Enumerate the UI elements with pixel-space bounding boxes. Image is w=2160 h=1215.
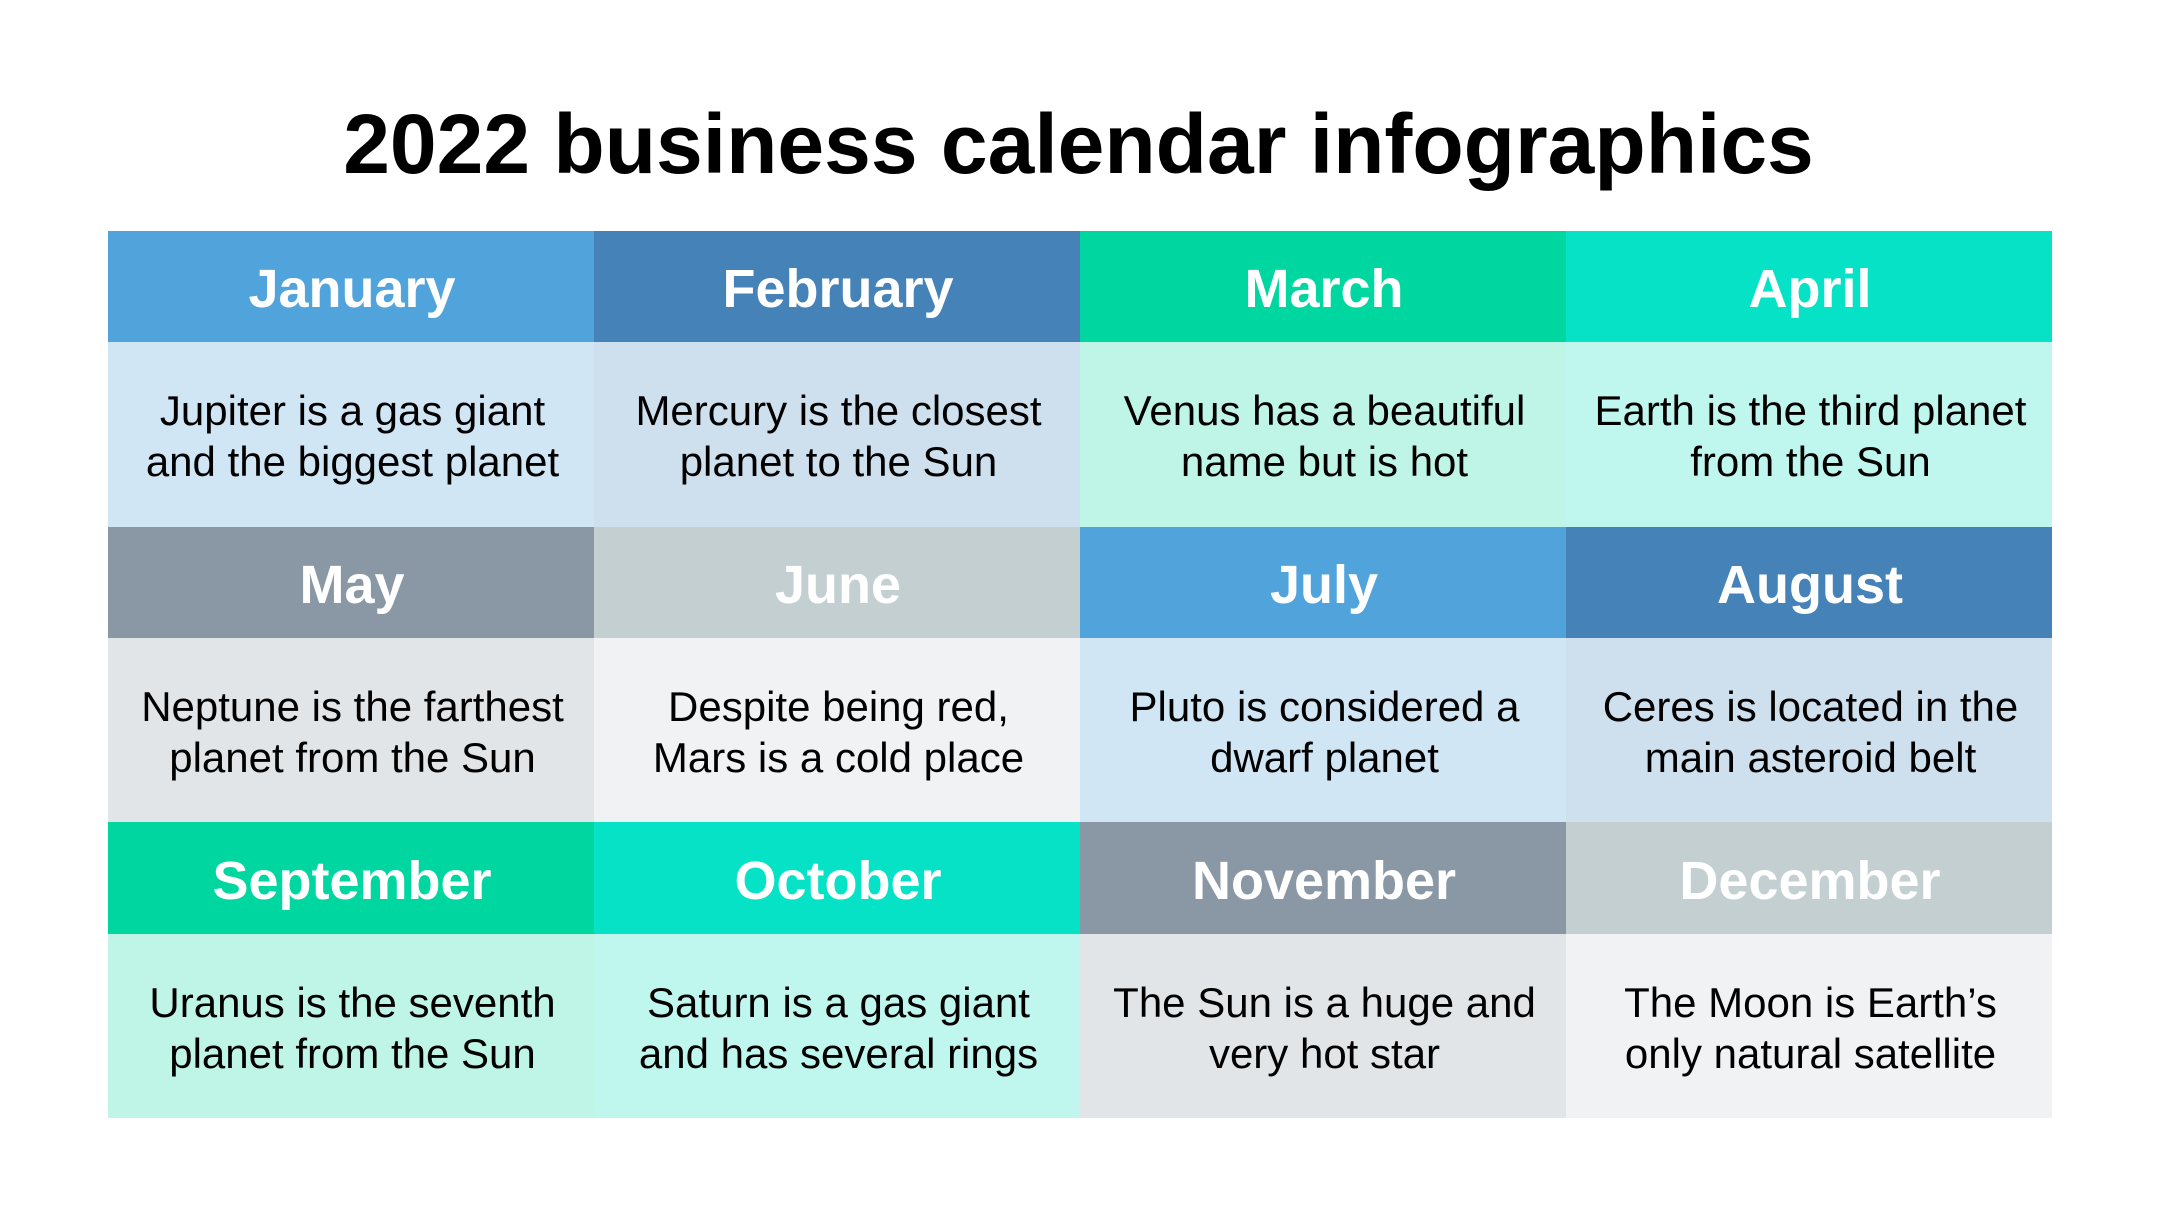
text: April description: from the Sun <box>1690 438 1931 484</box>
heading: March <box>1080 231 1566 342</box>
panel: March <box>1080 231 1566 527</box>
text: March description <box>1080 342 1566 527</box>
panel: September <box>108 822 594 1118</box>
text: March description: name but is hot <box>1181 438 1468 484</box>
heading: June <box>594 527 1080 638</box>
heading: March: March <box>1244 259 1404 319</box>
heading: August: August <box>1717 555 1903 615</box>
panel: June <box>594 527 1080 822</box>
panel: August <box>1566 527 2052 822</box>
text: August description <box>1566 638 2052 822</box>
text: September description: Uranus is the seventh <box>149 979 556 1026</box>
text: August description: main asteroid belt <box>1645 734 1976 780</box>
text: June description: Mars is a cold place <box>653 734 1024 780</box>
heading: June: June <box>775 555 901 615</box>
text: October description: Saturn is a gas giant <box>647 979 1030 1026</box>
panel: January <box>108 231 594 527</box>
text: February description: planet to the Sun <box>680 438 997 484</box>
text: June description <box>594 638 1080 822</box>
text: August description: Ceres is located in the <box>1603 683 2018 730</box>
text: May description: planet from the Sun <box>169 734 536 780</box>
heading: October: October <box>734 851 942 911</box>
panel: December <box>1566 822 2052 1118</box>
heading: November <box>1080 822 1566 934</box>
panel: July <box>1080 527 1566 822</box>
heading: January <box>108 231 594 342</box>
text: May description <box>108 638 594 822</box>
heading: January: January <box>248 259 456 319</box>
heading: May <box>108 527 594 638</box>
heading: November: November <box>1192 851 1456 911</box>
text: November description: very hot star <box>1209 1030 1440 1076</box>
text: January description: and the biggest planet <box>146 438 559 484</box>
heading: April <box>1566 231 2052 342</box>
text: November description <box>1080 934 1566 1118</box>
panel: May <box>108 527 594 822</box>
heading: December: December <box>1679 851 1941 911</box>
heading: October <box>594 822 1080 934</box>
text: March description: Venus has a beautiful <box>1124 387 1525 434</box>
text: July description <box>1080 638 1566 822</box>
text: October description <box>594 934 1080 1118</box>
text: December description: The Moon is Earth’s <box>1624 979 1997 1026</box>
heading: September <box>108 822 594 934</box>
text: February description <box>594 342 1080 527</box>
panel: October <box>594 822 1080 1118</box>
text: May description: Neptune is the farthest <box>141 683 564 730</box>
text: January description <box>108 342 594 527</box>
text: July description: Pluto is considered a <box>1130 683 1519 730</box>
heading: February: February <box>722 259 954 319</box>
text: January description: Jupiter is a gas giant <box>160 387 545 434</box>
text: September description <box>108 934 594 1118</box>
text: February description: Mercury is the closest <box>635 387 1042 434</box>
panel: February <box>594 231 1080 527</box>
heading: September: September <box>212 851 492 911</box>
text: April description <box>1566 342 2052 527</box>
text: November description: The Sun is a huge and <box>1113 979 1536 1026</box>
heading: May: May <box>299 555 405 615</box>
text: December description <box>1566 934 2052 1118</box>
text: April description: Earth is the third planet <box>1595 387 2026 434</box>
panel: November <box>1080 822 1566 1118</box>
text: October description: and has several rings <box>639 1030 1038 1076</box>
panel: April <box>1566 231 2052 527</box>
heading: February <box>594 231 1080 342</box>
heading: July <box>1080 527 1566 638</box>
text: July description: dwarf planet <box>1210 734 1439 780</box>
heading: December <box>1566 822 2052 934</box>
text: December description: only natural satellite <box>1625 1030 1996 1076</box>
heading: July: July <box>1270 555 1378 615</box>
title: 2022 business calendar infographics <box>343 97 1814 191</box>
text: September description: planet from the Sun <box>169 1030 536 1076</box>
text: June description: Despite being red, <box>668 683 1009 730</box>
heading: August <box>1566 527 2052 638</box>
heading: April: April <box>1748 259 1872 319</box>
